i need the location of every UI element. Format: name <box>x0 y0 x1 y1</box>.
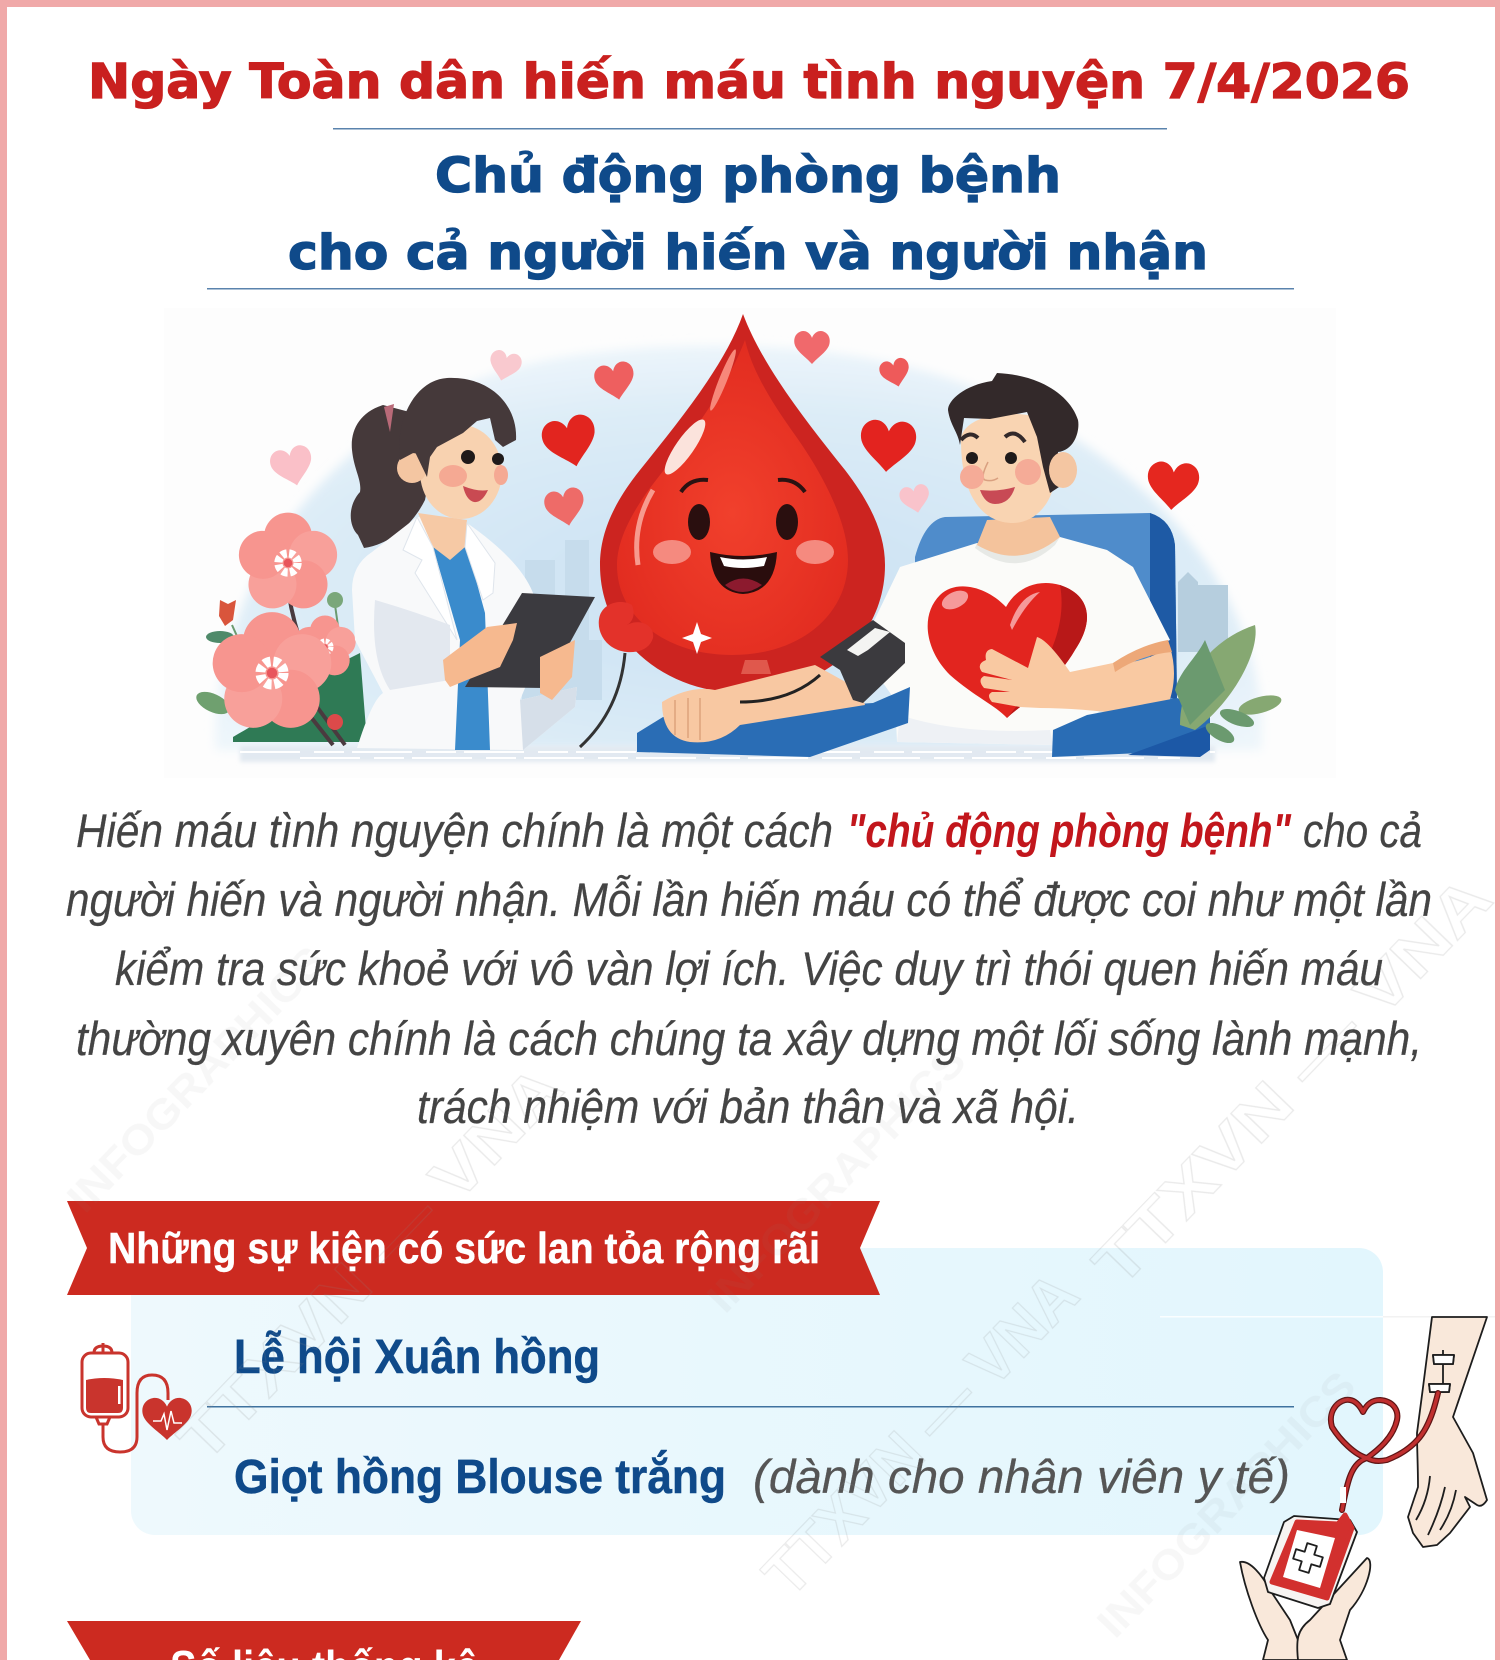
watermark: TTXVN — VNA <box>165 1053 576 1475</box>
intro paragraph: "chủ động phòng bệnh" <box>847 804 1292 857</box>
tube heart loop <box>1331 1393 1438 1510</box>
intro paragraph: trách nhiệm với bản thân và xã hội. <box>417 1080 1079 1133</box>
title: Ngày Toàn dân hiến máu tình nguyện 7/4/2026 <box>88 54 1410 110</box>
illustration: blood donation scene <box>164 308 1336 778</box>
heading ribbon: statistics <box>67 1621 581 1660</box>
watermark: INFOGRAPHICS <box>58 937 335 1221</box>
hearts <box>268 331 1200 530</box>
intro paragraph: cho cả <box>1303 804 1422 857</box>
skyline buildings <box>522 540 1228 700</box>
leaves <box>1175 625 1283 747</box>
doctor <box>351 378 595 750</box>
intro paragraph: kiểm tra sức khoẻ với vô vàn lợi ích. Việc duy trì thói quen hiến máu <box>115 942 1383 995</box>
event: Giọt hồng Blouse trắng: Giọt hồng Blouse trắng <box>234 1449 726 1504</box>
watermark: TTXVN — VNA <box>750 1260 1092 1610</box>
heading ribbon: events: Những sự kiện có sức lan tỏa rộng rãi <box>108 1224 820 1273</box>
intro paragraph <box>66 804 1432 1133</box>
watermark: INFOGRAPHICS <box>698 1037 975 1321</box>
man: arm and hand <box>980 637 1174 717</box>
ground brush <box>240 746 1215 762</box>
intro paragraph: Hiến máu tình nguyện chính là một cách <box>76 804 833 857</box>
donor arm and cuff <box>662 620 905 742</box>
man <box>860 373 1170 745</box>
armrests <box>637 687 1210 757</box>
upper hand <box>1408 1317 1487 1547</box>
subtitle line 2: cho cả người hiến và người nhận <box>288 225 1208 281</box>
watermark: INFOGRAPHICS <box>1088 1362 1365 1646</box>
man: big heart <box>928 583 1087 718</box>
panel: events <box>131 1248 1495 1535</box>
heading ribbon: events <box>67 1201 880 1295</box>
watermark <box>58 863 1500 1646</box>
event note: (dành cho nhân viên y tế) <box>753 1450 1290 1503</box>
pump and cable <box>580 602 653 747</box>
blood bag <box>1264 1516 1357 1608</box>
subtitle line 1: Chủ động phòng bệnh <box>435 148 1061 204</box>
blood drop character <box>600 314 885 693</box>
icon: hands with blood bag and tube <box>1240 1317 1487 1660</box>
event: Lễ hội Xuân hồng: Lễ hội Xuân hồng <box>234 1330 600 1384</box>
watermark: TTXVN — VNA <box>1080 863 1500 1300</box>
chair back <box>915 513 1177 700</box>
icon: blood bag and heart <box>82 1343 192 1452</box>
lower hands <box>1240 1562 1298 1660</box>
flowers <box>193 513 367 745</box>
